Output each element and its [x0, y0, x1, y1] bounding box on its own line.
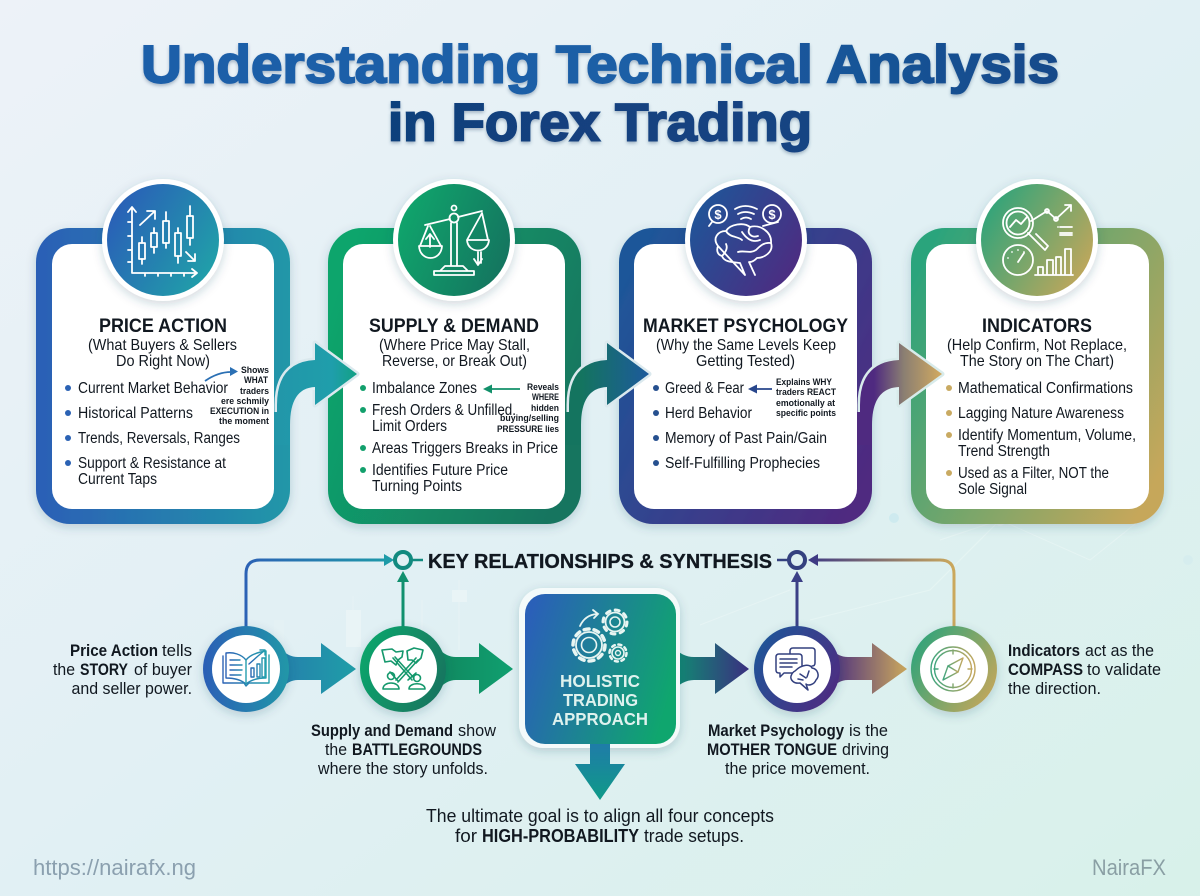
- text: market psychology mother tongue: MOTHER TONGUE: [707, 741, 837, 759]
- bullet list: indicators: Used as a Filter, NOT the: [958, 465, 1109, 482]
- bullet list: indicators: Lagging Nature Awareness: [958, 405, 1124, 422]
- label: holistic trading approach: APPROACH: [552, 709, 648, 729]
- bullet list: market psychology: Memory of Past Pain/Gain: [665, 430, 827, 447]
- bullet list: price action: [65, 380, 240, 488]
- callout: reveals where: PRESSURE lies: [497, 424, 559, 435]
- text: indicators compass: [1008, 642, 1161, 698]
- arrow: node 2 to holistic: [438, 643, 513, 694]
- subheading: indicators: (Help Confirm, Not Replace,: [947, 337, 1127, 354]
- arrow: node 1 to node 2: [280, 643, 356, 694]
- node: indicators compass: [911, 626, 997, 712]
- connector: left synthesis lines: [246, 552, 423, 628]
- subheading: market psychology: [656, 337, 836, 370]
- bullet list: supply and demand: Turning Points: [372, 478, 462, 495]
- heading: price action: PRICE ACTION: [99, 315, 227, 337]
- text: indicators compass: Indicators: [1008, 642, 1080, 660]
- footer: website url: https://nairafx.ng: [33, 855, 196, 880]
- arrow: supply and demand to market psychology: [565, 343, 649, 445]
- label: holistic trading approach: HOLISTIC: [560, 671, 640, 691]
- heading: market psychology: MARKET PSYCHOLOGY: [643, 315, 848, 337]
- icon: open book with chart: [223, 650, 269, 686]
- panel: supply and demand: [328, 179, 581, 524]
- title: in Forex Trading: [388, 94, 812, 152]
- callout: reveals where: buying/selling: [500, 413, 559, 424]
- callout: reveals where: hidden: [531, 403, 559, 414]
- subheading: supply and demand: (Where Price May Stall,: [379, 337, 530, 354]
- subheading: market psychology: Getting Tested): [696, 353, 795, 370]
- text: market psychology mother tongue: [707, 722, 889, 778]
- title: Understanding Technical Analysis: [141, 36, 1059, 94]
- title: [141, 36, 1059, 152]
- panel: market psychology: $: [768, 207, 776, 222]
- text: market psychology mother tongue: is the: [849, 722, 888, 740]
- callout: shows what traders: EXECUTION in: [210, 406, 269, 417]
- text: supply and demand battlegrounds: show: [458, 722, 496, 740]
- callout: reveals where: Reveals: [527, 382, 559, 393]
- heading: supply and demand: SUPPLY & DEMAND: [369, 315, 539, 337]
- text: supply and demand battlegrounds: Supply and Demand: [311, 722, 453, 740]
- panel: indicators: [911, 179, 1164, 524]
- text: indicators compass: the direction.: [1008, 680, 1101, 698]
- text: market psychology mother tongue: driving: [842, 741, 889, 759]
- text: ultimate goal: for: [455, 826, 477, 846]
- subheading: price action: (What Buyers & Sellers: [88, 337, 237, 354]
- text: ultimate goal: [426, 806, 774, 846]
- icon: gears: [573, 610, 627, 662]
- panel: market psychology: [619, 179, 872, 524]
- callout: shows what traders: traders: [240, 386, 269, 397]
- callout: shows what traders: ere schmily: [221, 396, 270, 407]
- subheading: indicators: [947, 337, 1127, 370]
- callout: shows what traders: Shows: [241, 365, 269, 376]
- bullet list: supply and demand: Identifies Future Price: [372, 462, 508, 479]
- bullet list: indicators: Mathematical Confirmations: [958, 380, 1133, 397]
- label: holistic trading approach: TRADING: [563, 690, 638, 710]
- text: price action story: STORY: [80, 661, 128, 679]
- node: price action story: [203, 626, 289, 712]
- text: price action story: tells: [162, 642, 192, 660]
- bullet list: supply and demand: Imbalance Zones: [372, 380, 477, 397]
- callout: reveals where: [483, 382, 559, 435]
- text: ultimate goal: trade setups.: [644, 826, 744, 846]
- callout: explains why: traders REACT: [776, 387, 836, 398]
- bullet list: market psychology: [653, 380, 827, 472]
- panel: price action: [36, 179, 290, 524]
- text: supply and demand battlegrounds: the: [325, 741, 347, 759]
- subheading: indicators: The Story on The Chart): [960, 353, 1114, 370]
- text: supply and demand battlegrounds: BATTLEGROUNDS: [352, 741, 482, 759]
- text: indicators compass: to validate: [1087, 661, 1161, 679]
- holistic trading approach box: [519, 588, 680, 748]
- text: ultimate goal: HIGH-PROBABILITY: [482, 826, 639, 846]
- panel: market psychology: $: [714, 207, 722, 222]
- subheading: price action: [88, 337, 237, 370]
- text: supply and demand battlegrounds: [311, 722, 496, 778]
- arrow: node 3 to node 4: [830, 643, 907, 694]
- arrow: holistic down to goal: [575, 744, 625, 800]
- text: supply and demand battlegrounds: where the story unfolds.: [317, 760, 488, 778]
- callout: shows what traders: [205, 365, 270, 427]
- icon: compass: [931, 647, 975, 691]
- callout: shows what traders: WHAT: [244, 375, 268, 386]
- bullet list: market psychology: Herd Behavior: [665, 405, 752, 422]
- callout: explains why: [748, 377, 836, 419]
- subheading: supply and demand: Reverse, or Break Out): [382, 353, 527, 370]
- arrow: market psychology to indicators: [857, 343, 942, 445]
- bullet list: indicators: Trend Strength: [958, 443, 1050, 460]
- text: price action story: the: [53, 661, 75, 679]
- arrow: holistic to node 3: [672, 643, 749, 694]
- subheading: market psychology: (Why the Same Levels Keep: [656, 337, 836, 354]
- bullet list: supply and demand: Limit Orders: [372, 418, 447, 435]
- callout: explains why: Explains WHY: [776, 377, 833, 388]
- bullet list: price action: Current Market Behavior: [78, 380, 228, 397]
- arrow: price action to supply and demand: [274, 343, 357, 445]
- icon: chat bubbles and brain: [776, 648, 818, 690]
- text: ultimate goal: The ultimate goal is to align all four concepts: [426, 806, 774, 826]
- callout: explains why: specific points: [776, 408, 836, 419]
- connector: right synthesis lines: [777, 552, 954, 628]
- bullet list: price action: Current Taps: [78, 471, 157, 488]
- icon: balance scale: [419, 206, 489, 275]
- text: price action story: Price Action: [70, 642, 158, 660]
- background decoration: faint candles and network: [274, 500, 1193, 650]
- text: price action story: [53, 642, 192, 698]
- bullet list: price action: Trends, Reversals, Ranges: [78, 430, 240, 447]
- text: market psychology mother tongue: the price movement.: [725, 760, 870, 778]
- node: market psychology mother tongue: [754, 626, 840, 712]
- text: price action story: and seller power.: [72, 680, 192, 698]
- bullet list: indicators: Identify Momentum, Volume,: [958, 427, 1136, 444]
- subheading: price action: Do Right Now): [116, 353, 210, 370]
- callout: shows what traders: the moment: [219, 416, 270, 427]
- label: holistic trading approach: [552, 671, 648, 729]
- heading: key relationships: KEY RELATIONSHIPS & SYNTHESIS: [428, 550, 772, 573]
- text: price action story: of buyer: [134, 661, 192, 679]
- bullet list: supply and demand: Fresh Orders & Unfilled.: [372, 402, 516, 419]
- callout: reveals where: WHERE: [532, 392, 559, 403]
- text: market psychology mother tongue: Market Psychology: [708, 722, 845, 740]
- node: supply and demand battlegrounds: [360, 626, 446, 712]
- bullet list: price action: Support & Resistance at: [78, 455, 227, 472]
- text: indicators compass: act as the: [1085, 642, 1154, 660]
- icon: magnifier, gauge and bars: [1003, 205, 1073, 275]
- icon: candlestick chart: [128, 206, 197, 277]
- text: indicators compass: COMPASS: [1008, 661, 1083, 679]
- icon: brain with money: [709, 205, 781, 275]
- subheading: supply and demand: [379, 337, 530, 370]
- bullet list: indicators: [946, 380, 1136, 498]
- bullet list: indicators: Sole Signal: [958, 481, 1027, 498]
- bullet list: market psychology: Self-Fulfilling Prophecies: [665, 455, 820, 472]
- icon: crossed swords with maps: [382, 648, 425, 689]
- bullet list: supply and demand: Areas Triggers Breaks in Price: [372, 440, 558, 457]
- footer: brand name: NairaFX: [1092, 855, 1166, 880]
- heading: indicators: INDICATORS: [982, 315, 1092, 337]
- callout: explains why: emotionally at: [776, 398, 836, 409]
- bullet list: market psychology: Greed & Fear: [665, 380, 744, 397]
- bullet list: supply and demand: [360, 380, 558, 495]
- bullet list: price action: Historical Patterns: [78, 405, 193, 422]
